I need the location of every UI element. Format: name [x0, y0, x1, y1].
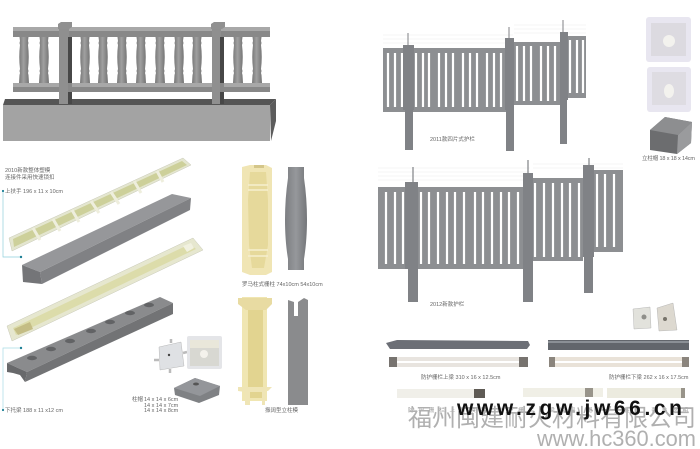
posts: [58, 22, 225, 104]
slats gaps: [386, 174, 614, 264]
leader line: bottom beam: [2, 347, 22, 411]
cap plate: [154, 339, 187, 373]
post cap block: [650, 117, 692, 154]
watermark: zgw url: www.zgw.jw66.cn: [456, 397, 682, 420]
lower beam set: [548, 340, 689, 367]
intro caption: 2010新款整体塑模: [5, 166, 51, 174]
small long moulds: [397, 388, 685, 398]
cap block: [174, 378, 220, 403]
caption: cap sizes: 14 x 14 x 6cm: [144, 397, 179, 403]
caption: cap sizes: [132, 395, 179, 414]
caption: fence 2011: 2011款四片式护栏: [430, 135, 475, 143]
top rail mould: [9, 158, 191, 251]
caption: bottom beam: 下托梁 188 x 11 x12 cm: [5, 406, 63, 414]
post gray casting: [288, 298, 308, 405]
caption: roman baluster: 罗马柱式栅柱 74x10cm 54x10cm: [242, 280, 323, 288]
caption: cap sizes: 柱帽: [132, 395, 144, 403]
caption: cap sizes: 14 x 14 x 8cm: [144, 408, 179, 414]
balusters: [19, 37, 262, 83]
posts and spikes: [405, 158, 594, 302]
caption: top rail: 上扶手 196 x 11 x 10cm: [5, 187, 63, 195]
rails: [13, 27, 270, 92]
faint mesh: [383, 25, 586, 43]
caption: cap sizes: 14 x 14 x 7cm: [144, 403, 179, 409]
concrete base: [3, 99, 276, 141]
leader line: top rail: [2, 190, 22, 258]
watermark: company name: 福州闽建耐火材料有限公司: [408, 405, 696, 432]
intro caption: [5, 166, 55, 181]
bottom beam gray casting: [7, 297, 173, 382]
small end moulds: [633, 303, 677, 331]
square cap moulds: [646, 17, 691, 112]
caption: post mould: 振阔型立柱模: [265, 406, 299, 414]
bottom beam mould: [7, 238, 203, 341]
fence 2011: [383, 20, 586, 151]
intro caption: 连接件采用快速锁扣: [5, 173, 55, 181]
caption: lower beam: 防护栅栏下梁 262 x 16 x 17.5cm: [609, 373, 689, 381]
faded caption row: 防护栅栏上梁模具 防护栅栏下梁模具 配件 立柱帽 套装说明: [408, 406, 688, 414]
slats gaps: [388, 40, 583, 107]
panels: [378, 170, 623, 269]
balustrade illustration: [3, 22, 276, 141]
post mould: [238, 297, 272, 405]
caption: upper beam: 防护栅栏上梁 310 x 16 x 12.5cm: [421, 373, 501, 381]
panels: [383, 36, 586, 112]
caption: post cap: 立柱帽 18 x 18 x 14cm: [642, 154, 695, 162]
posts and spikes: [403, 20, 568, 151]
upper beam set: [386, 340, 530, 367]
caption: fence 2012: 2012新款护栏: [430, 300, 465, 308]
faint mesh: [378, 164, 623, 180]
roman baluster mould: [242, 165, 272, 275]
roman baluster gray casting: [285, 167, 307, 270]
top rail gray casting: [22, 194, 191, 284]
fence 2012: [378, 158, 623, 302]
cap mould square: [187, 336, 222, 369]
